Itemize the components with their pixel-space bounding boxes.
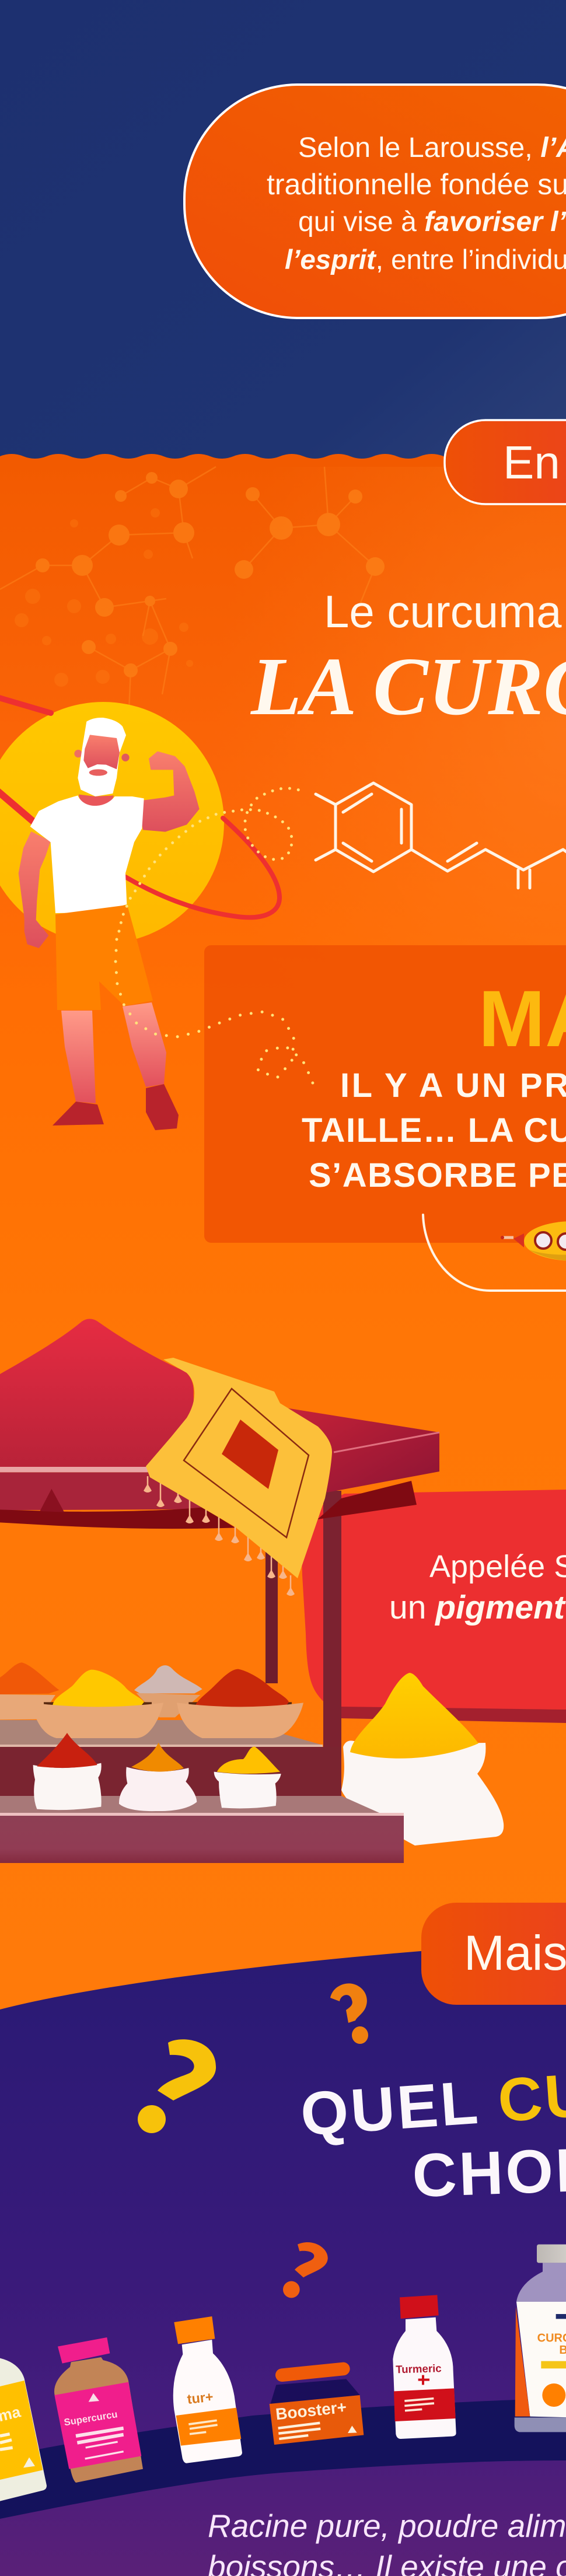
- icon: dark orange question mark: [283, 2242, 328, 2298]
- illustration: faded molecular network: [0, 467, 385, 723]
- badge: Mais: [421, 1903, 566, 2005]
- section: navy intro background: [0, 0, 566, 467]
- icon: small orange question mark: [330, 1983, 368, 2044]
- stall roof: [0, 1319, 439, 1529]
- illustration: Booster+ jar: Booster+: [275, 2398, 347, 2423]
- icon: large yellow question mark: [138, 2039, 216, 2133]
- text block: closing statement: [208, 2508, 566, 2576]
- illustration: muscular old man: [19, 718, 200, 1130]
- illustration: red hoop: [0, 697, 279, 917]
- section: purple background: [0, 1943, 566, 2576]
- panel: red saffron banner: [301, 1490, 566, 1723]
- illustration: market stall: [0, 1319, 504, 1863]
- illustration: large curcuma bottle: [515, 2245, 566, 2432]
- big sack of turmeric: [341, 1673, 504, 1846]
- section: orange curcumin background with wavy top: [0, 454, 566, 2042]
- illustration: Turmeric+ bottle: [393, 2295, 456, 2439]
- illustration: tur+ bottle: tur+: [186, 2389, 214, 2407]
- badge: En: En: [503, 436, 560, 488]
- text block: absorption problem: [302, 1067, 566, 1194]
- illustration: yellow sun disc: [0, 702, 224, 943]
- illustration: dark navy shelf arc: [0, 2398, 566, 2519]
- stall posts: [265, 1491, 341, 1797]
- icon: yellow submarine: [501, 1221, 566, 1261]
- decorative light right glow: [175, 467, 566, 992]
- arrow: white curve under submarine: [423, 1215, 566, 1291]
- illustration: Supercurcu bottle: [54, 2337, 143, 2483]
- icon: curcumin molecule formula: [316, 783, 566, 888]
- illustration: Turmeric+ bottle: Turmeric: [396, 2362, 442, 2375]
- panel: problem box background: [204, 945, 566, 1243]
- illustration: Supercurcu bottle: Supercurcu: [63, 2409, 118, 2428]
- illustration: Booster+ jar: [270, 2369, 364, 2445]
- badge: En: [445, 420, 566, 504]
- panel: definition pill: [184, 85, 566, 318]
- illustration: tur+ bottle: [173, 2316, 242, 2463]
- arrow: dotted path from man to molecule: [116, 788, 315, 1090]
- counter with bowls and sacks: [0, 1662, 404, 1863]
- hanging rug with tassels: [144, 1358, 332, 1596]
- illustration: cream curcuma bottle: [0, 2358, 47, 2501]
